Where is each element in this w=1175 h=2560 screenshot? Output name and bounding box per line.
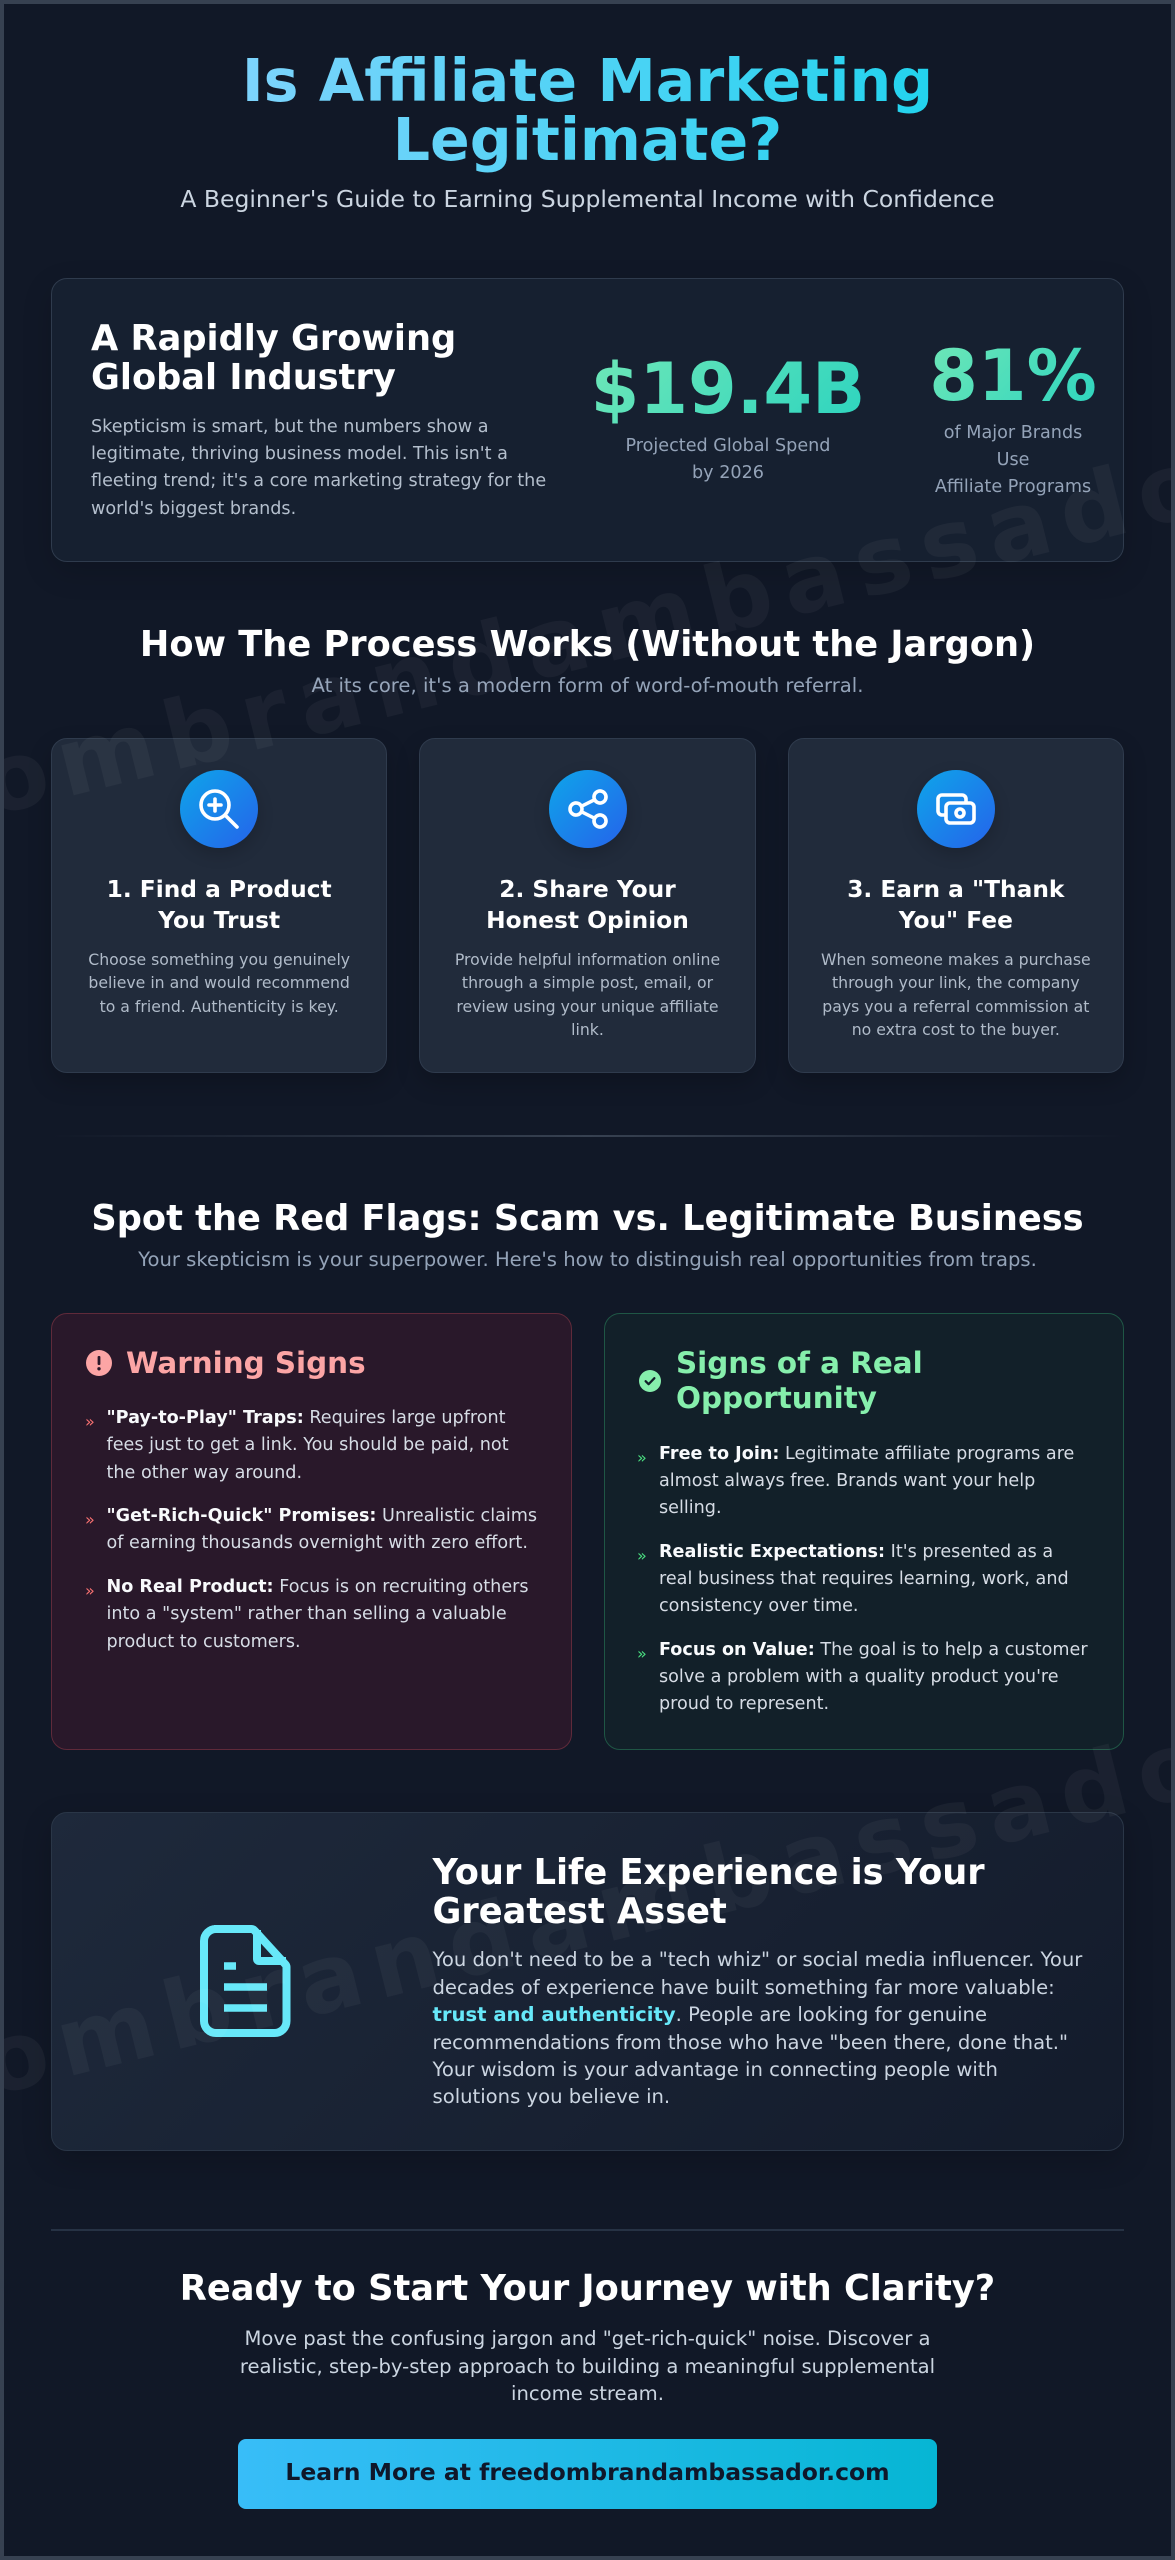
opportunity bullet 1: » <box>637 1448 647 1466</box>
text: industry description: Skepticism is smart, but the numbers show a <box>91 417 489 437</box>
step 2 text: Provide helpful information online <box>455 950 720 969</box>
opportunity bullet 1 <box>637 1444 1074 1518</box>
opportunity bullet 1: Free to Join: Legitimate affiliate programs are <box>659 1444 1074 1464</box>
step 1 title: 1. Find a Product <box>107 876 332 903</box>
panel: life experience <box>51 1812 1124 2151</box>
title: Legitimate? <box>393 106 782 174</box>
stat: major brands: Use <box>997 450 1029 470</box>
text: industry description: legitimate, thriving business model. This isn't a <box>91 444 508 464</box>
text: life experience: solutions you believe in. <box>432 2085 670 2108</box>
heading: rapidly growing <box>91 318 456 398</box>
subtitle: A Beginner's Guide to Earning Supplemental Income with Confidence <box>180 185 995 213</box>
warning bullet 3: » <box>85 1581 95 1600</box>
title <box>242 47 933 174</box>
stat: global spend <box>591 348 865 483</box>
step 3 text: through your link, the company <box>832 973 1080 992</box>
opportunity bullet 3: Focus on Value: The goal is to help a customer <box>659 1640 1088 1660</box>
panel: global industry <box>51 278 1124 562</box>
opportunity bullet 3: solve a problem with a quality product you're <box>659 1667 1059 1687</box>
button: Learn More at freedombrandambassador.com <box>285 2458 890 2486</box>
step 3 title: 3. Earn a "Thank <box>847 876 1064 903</box>
stat: global spend: $19.4B <box>591 348 865 430</box>
opportunity bullet 1: selling. <box>659 1498 722 1518</box>
text: life experience: You don't need to be a "tech whiz" or social media influencer. Your <box>432 1948 1082 1971</box>
warning bullet 2: "Get-Rich-Quick" Promises: Unrealistic claims <box>106 1506 537 1526</box>
step 1 text: to a friend. Authenticity is key. <box>100 997 339 1016</box>
warning bullet 2 <box>85 1506 537 1553</box>
opportunity bullet 3: proud to represent. <box>659 1694 829 1714</box>
warning bullet 1: » <box>85 1412 95 1431</box>
stat: major brands: Affiliate Programs <box>935 477 1091 497</box>
step 2 text <box>455 950 720 1039</box>
warning bullet 3 <box>85 1577 529 1652</box>
heading: life experience <box>432 1852 985 1932</box>
text: industry description: world's biggest brands. <box>91 499 296 519</box>
stat: global spend: Projected Global Spend <box>626 436 830 456</box>
warning bullet 2: of earning thousands overnight with zero effort. <box>106 1533 528 1553</box>
step 1 title <box>107 876 332 934</box>
step 3 text: no extra cost to the buyer. <box>852 1020 1060 1039</box>
icon: share <box>548 770 626 848</box>
step 3 text <box>821 950 1091 1039</box>
opportunity heading: Opportunity <box>676 1380 877 1414</box>
panel: warning signs <box>51 1312 572 1750</box>
warning heading: Warning Signs <box>126 1346 366 1380</box>
subheading: process: At its core, it's a modern form of word-of-mouth referral. <box>312 674 863 697</box>
card: step 3 <box>788 738 1124 1073</box>
button <box>238 2439 937 2509</box>
warning bullet 1 <box>85 1408 509 1482</box>
step 2 title: Honest Opinion <box>486 907 689 934</box>
step 2 title <box>486 876 689 934</box>
stat: major brands: of Major Brands <box>944 423 1082 443</box>
icon: warning <box>86 1350 112 1376</box>
opportunity bullet 3 <box>637 1640 1088 1714</box>
warning bullet 1: the other way around. <box>106 1462 302 1482</box>
warning bullet 1: "Pay-to-Play" Traps: Requires large upfront <box>106 1408 506 1428</box>
opportunity bullet 3: » <box>637 1644 647 1662</box>
text: industry description <box>91 417 546 519</box>
text: call to action: realistic, step-by-step approach to building a meaningful supplemental <box>240 2355 935 2378</box>
step 1 text: Choose something you genuinely <box>88 950 350 969</box>
heading: red flags: Spot the Red Flags: Scam vs. Legitimate Business <box>91 1198 1084 1239</box>
text: industry description: fleeting trend; it's a core marketing strategy for the <box>91 471 546 491</box>
text: call to action: income stream. <box>511 2382 664 2405</box>
opportunity bullet 2: » <box>637 1546 647 1564</box>
text: life experience: trust and authenticity. People are looking for genuine <box>432 2003 987 2026</box>
card: step 1 <box>51 738 387 1073</box>
step 3 title <box>847 876 1065 934</box>
heading: rapidly growing: Global Industry <box>91 356 396 398</box>
title: Is Affiliate Marketing <box>242 47 933 115</box>
panel: real opportunity <box>604 1312 1124 1750</box>
warning bullet 3: into a "system" rather than selling a valuable <box>106 1604 507 1624</box>
stat: global spend: by 2026 <box>692 463 764 483</box>
warning bullet 1: fees just to get a link. You should be paid, not <box>106 1435 509 1455</box>
step 2 text: link. <box>571 1020 604 1039</box>
text: life experience: decades of experience have built something far more valuable: <box>432 1976 1055 1999</box>
step 1 text <box>88 950 350 1016</box>
text: call to action <box>240 2327 935 2405</box>
opportunity bullet 2: real business that requires learning, work, and <box>659 1569 1069 1589</box>
card: step 2 <box>419 738 756 1073</box>
icon: check <box>639 1370 661 1392</box>
step 2 title: 2. Share Your <box>499 876 676 903</box>
text: call to action: Move past the confusing jargon and "get-rich-quick" noise. Discover a <box>245 2327 930 2350</box>
step 2 text: review using your unique affiliate <box>456 997 719 1016</box>
warning bullet 3: product to customers. <box>106 1632 301 1652</box>
warning bullet 3: No Real Product: Focus is on recruiting others <box>106 1577 529 1597</box>
opportunity heading <box>676 1346 923 1414</box>
opportunity bullet 1: almost always free. Brands want your help <box>659 1471 1035 1491</box>
text: life experience: recommendations from those who have "been there, done that." <box>432 2031 1068 2054</box>
heading: call to action: Ready to Start Your Journey with Clarity? <box>180 2268 995 2309</box>
opportunity bullet 2: consistency over time. <box>659 1596 859 1616</box>
step 3 text: pays you a referral commission at <box>822 997 1089 1016</box>
step 3 text: When someone makes a purchase <box>821 950 1091 969</box>
step 3 title: You" Fee <box>899 907 1013 934</box>
heading: life experience: Greatest Asset <box>432 1890 727 1932</box>
stat: major brands: 81% <box>929 335 1097 417</box>
heading: process: How The Process Works (Without the Jargon) <box>140 624 1035 665</box>
step 2 text: through a simple post, email, or <box>462 973 713 992</box>
text: life experience: Your wisdom is your advantage in connecting people with <box>432 2058 998 2081</box>
icon: money <box>917 770 995 848</box>
heading: life experience: Your Life Experience is Your <box>432 1852 985 1892</box>
heading: rapidly growing: A Rapidly Growing <box>91 318 456 358</box>
opportunity bullet 2 <box>637 1542 1069 1616</box>
opportunity bullet 2: Realistic Expectations: It's presented as a <box>659 1542 1053 1562</box>
warning bullet 2: » <box>85 1510 95 1529</box>
stat: major brands <box>929 335 1097 497</box>
step 1 text: believe in and would recommend <box>88 973 350 992</box>
text: life experience <box>432 1948 1082 2108</box>
subheading: red flags: Your skepticism is your superpower. Here's how to distinguish real opportunities from traps. <box>138 1248 1037 1271</box>
icon: magnifier <box>180 770 258 848</box>
opportunity heading: Signs of a Real <box>676 1346 923 1380</box>
icon: document <box>200 1925 290 2037</box>
step 1 title: You Trust <box>158 907 280 934</box>
